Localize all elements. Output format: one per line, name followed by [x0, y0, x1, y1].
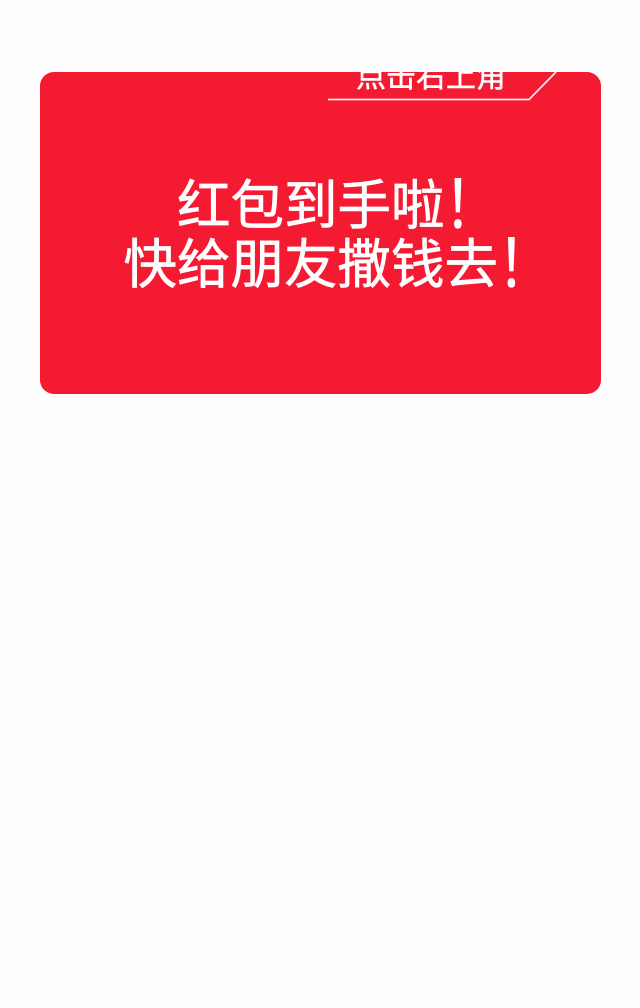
main message: 红包到手啦: [177, 177, 444, 236]
main message: ！: [498, 229, 552, 301]
panel: red packet card: [40, 72, 601, 394]
main message: 快给朋友撒钱去: [124, 236, 498, 295]
main message: [124, 170, 552, 301]
main message: ！: [444, 170, 498, 242]
hint underline with angled stroke: [328, 72, 556, 100]
